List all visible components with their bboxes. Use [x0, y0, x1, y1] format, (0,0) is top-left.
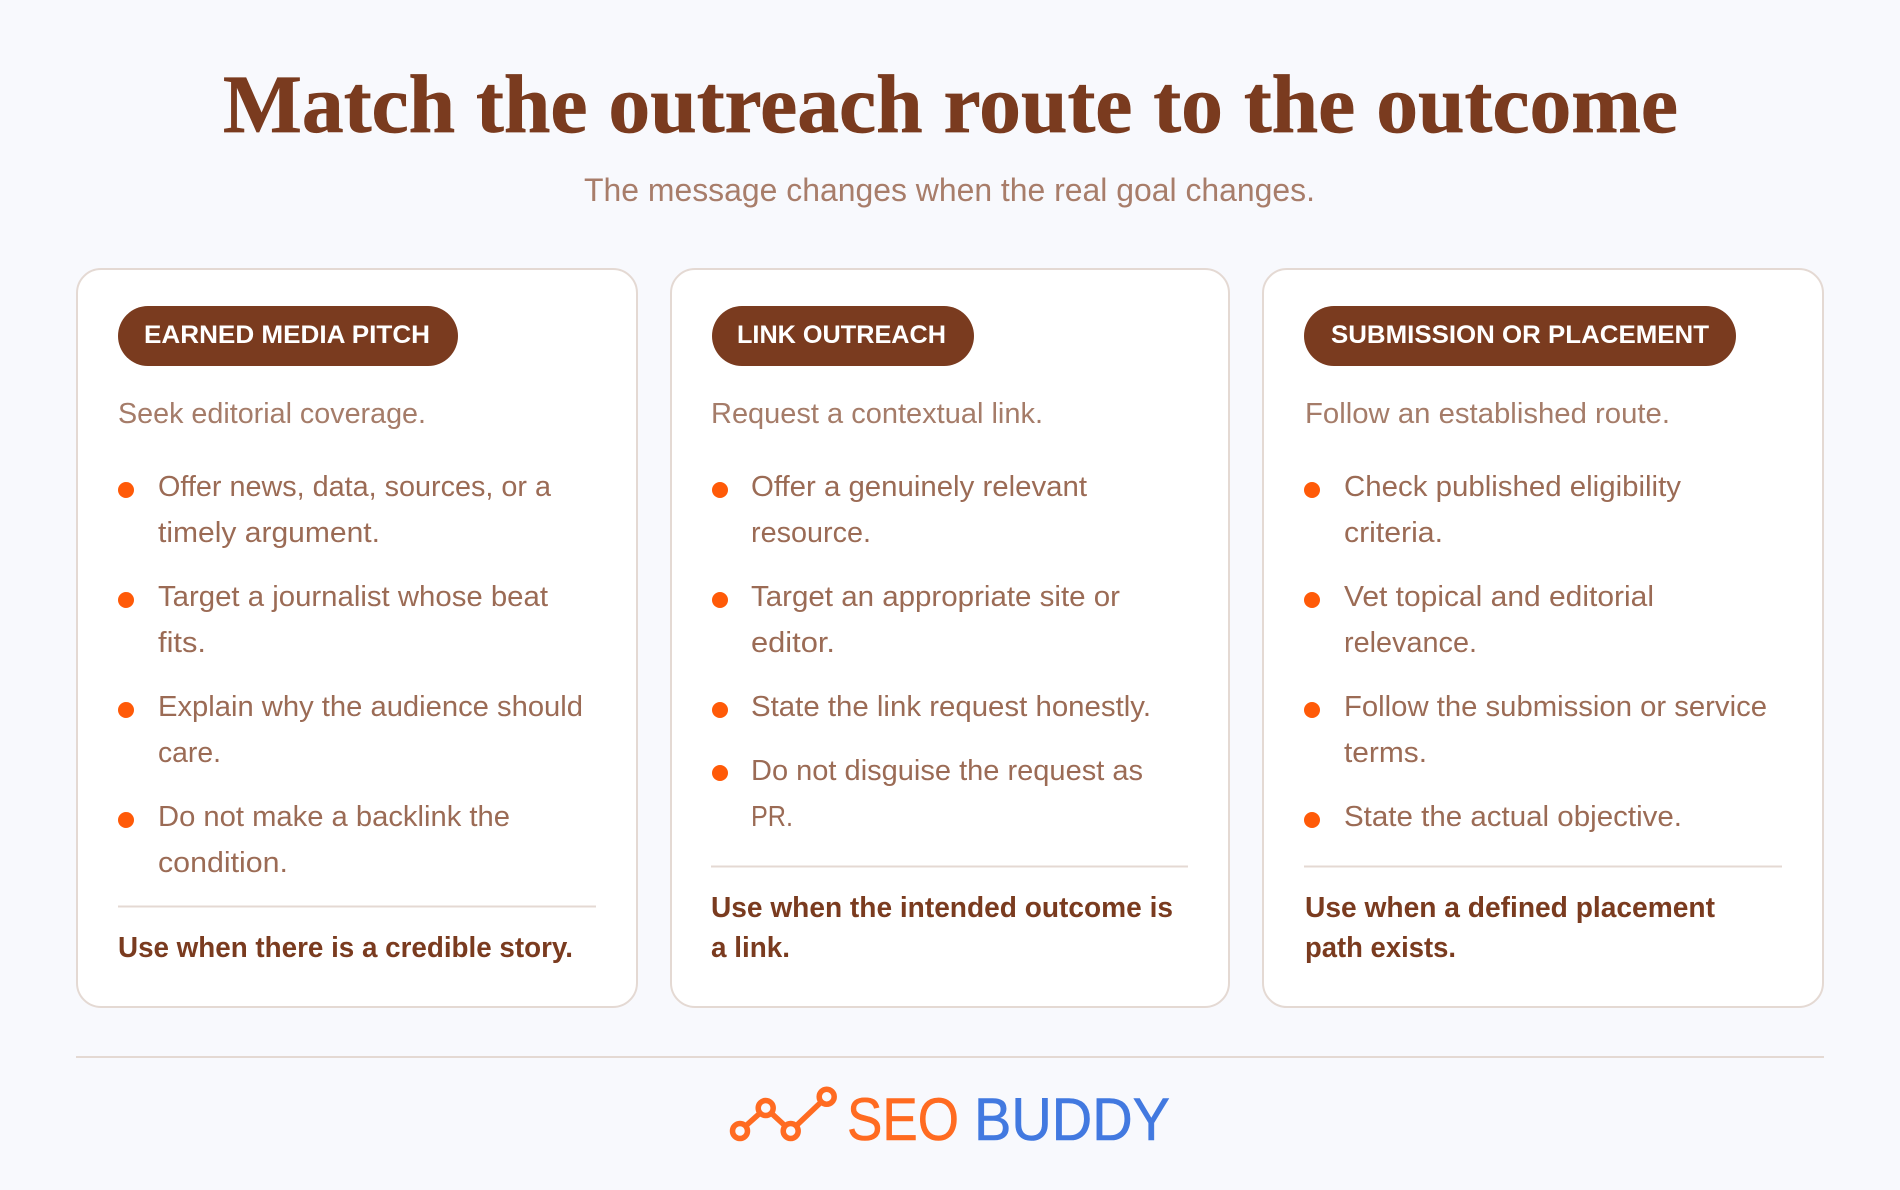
panel: submission or placement	[1263, 269, 1823, 1007]
badge: submission or placement: SUBMISSION OR PLACEMENT	[1331, 321, 1709, 349]
bullet: explain why: care.	[158, 737, 221, 769]
use-when note	[711, 892, 1173, 964]
badge: submission or placement	[1304, 306, 1736, 366]
bullet: follow terms: terms.	[1344, 737, 1427, 769]
tagline: Seek editorial coverage.	[118, 398, 426, 430]
bullet: do not disguise: PR.	[751, 801, 793, 833]
bullet: target journalist: fits.	[158, 627, 206, 659]
bullet: follow terms: Follow the submission or service	[1344, 691, 1767, 723]
bullet: do not disguise: Do not disguise the request as	[751, 755, 1143, 787]
tagline: Follow an established route.	[1305, 398, 1670, 430]
badge: earned media pitch	[118, 306, 458, 366]
use-when note: Use when the intended outcome is	[711, 892, 1173, 924]
badge: link outreach: LINK OUTREACH	[737, 321, 946, 349]
subtitle: The message changes when the real goal changes.	[584, 172, 1315, 208]
bullet: target site	[712, 581, 1121, 659]
wordmark: BUDDY: BUDDY	[974, 1086, 1170, 1153]
icon: trend line	[732, 1089, 834, 1138]
bullet: target journalist	[118, 581, 548, 659]
bullet: follow terms	[1304, 691, 1767, 769]
bullet: backlink condition: condition.	[158, 847, 288, 879]
bullet: vet relevance: relevance.	[1344, 627, 1477, 659]
use-when note: Use when there is a credible story.	[118, 932, 573, 964]
title: Match the outreach route to the outcome	[223, 58, 1678, 150]
wordmark: SEO: SEO	[847, 1086, 959, 1153]
panel: earned media pitch	[77, 269, 637, 1007]
bullet: check criteria: Check published eligibility	[1344, 471, 1682, 503]
bullet: offer news: timely argument.	[158, 517, 380, 549]
bullet: offer resource	[712, 471, 1087, 549]
bullet: target site: Target an appropriate site or	[751, 581, 1121, 613]
bullet: backlink condition: Do not make a backlink the	[158, 801, 510, 833]
use-when note: path exists.	[1305, 932, 1456, 964]
bullet: state request: State the link request honestly.	[751, 691, 1151, 723]
bullet: target site: editor.	[751, 627, 835, 659]
bullet: vet relevance	[1304, 581, 1654, 659]
bullet: backlink condition	[118, 801, 510, 879]
bullet: offer resource: resource.	[751, 517, 871, 549]
logo: SEO Buddy	[732, 1086, 1170, 1153]
bullet: check criteria	[1304, 471, 1682, 549]
bullet: offer news	[118, 471, 551, 549]
bullet: offer resource: Offer a genuinely relevant	[751, 471, 1087, 503]
bullet: target journalist: Target a journalist whose beat	[158, 581, 548, 613]
bullet: explain why: Explain why the audience should	[158, 691, 583, 723]
bullet: state objective: State the actual objective.	[1344, 801, 1682, 833]
panel: link outreach	[671, 269, 1229, 1007]
bullet: vet relevance: Vet topical and editorial	[1344, 581, 1654, 613]
bullet: do not disguise	[712, 755, 1143, 833]
tagline: Request a contextual link.	[711, 398, 1043, 430]
badge: link outreach	[712, 306, 974, 366]
bullet: offer news: Offer news, data, sources, or a	[158, 471, 551, 503]
use-when note	[1305, 892, 1715, 964]
bullet: check criteria: criteria.	[1344, 517, 1443, 549]
badge: earned media pitch: EARNED MEDIA PITCH	[144, 321, 430, 349]
use-when note: Use when a defined placement	[1305, 892, 1715, 924]
bullet: explain why	[118, 691, 583, 769]
use-when note: a link.	[711, 932, 790, 964]
